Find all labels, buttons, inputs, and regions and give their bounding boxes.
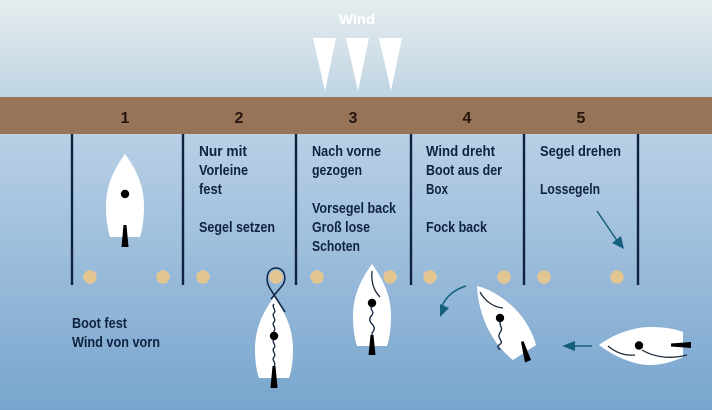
water background xyxy=(0,134,712,410)
box dividers xyxy=(72,134,638,285)
text: step 4: Box xyxy=(426,181,449,198)
boat 1 xyxy=(106,154,144,247)
arrow: sail out of box xyxy=(597,211,624,249)
text: step 3: Vorsegel back xyxy=(312,200,397,217)
text: step 4 xyxy=(426,143,502,236)
text: step 2: Vorleine xyxy=(199,162,248,179)
text: step 5: Segel drehen xyxy=(540,143,621,160)
boat 2 with bow line xyxy=(255,268,293,388)
text: step 1: Wind von vorn xyxy=(72,334,160,351)
text: step 3: Groß lose xyxy=(312,219,370,236)
arrow: boat swings to port xyxy=(440,286,466,317)
bow line around pile xyxy=(267,268,285,312)
text: step 3: Schoten xyxy=(312,238,360,255)
step numbers: 3 xyxy=(349,110,358,127)
step numbers: 2 xyxy=(235,110,244,127)
step numbers xyxy=(121,110,586,127)
text: step 4: Boot aus der xyxy=(426,162,502,179)
text: step 1 xyxy=(72,315,160,351)
text: step 1: Boot fest xyxy=(72,315,127,332)
step numbers: 5 xyxy=(577,110,586,127)
text: step 4: Fock back xyxy=(426,219,488,236)
step numbers: 1 xyxy=(121,110,130,127)
text: step 2: fest xyxy=(199,181,222,198)
arrow: sailing away xyxy=(562,341,592,351)
boat 4 xyxy=(477,286,536,362)
text: step 2: Nur mit xyxy=(199,143,247,160)
boat 5 xyxy=(599,327,691,365)
icon: wind arrows xyxy=(313,38,402,91)
text: step 5 xyxy=(540,143,621,198)
text: step 2: Segel setzen xyxy=(199,219,275,236)
sky background xyxy=(0,0,712,98)
text: step 3: gezogen xyxy=(312,162,362,179)
boat 3 xyxy=(353,264,391,355)
text: step 5: Lossegeln xyxy=(540,181,600,198)
text: step 3 xyxy=(312,143,397,255)
mooring piles xyxy=(83,270,624,284)
text: step 3: Nach vorne xyxy=(312,143,381,160)
wind heading: Wind xyxy=(339,12,375,27)
pier xyxy=(0,97,712,134)
step numbers: 4 xyxy=(463,110,472,127)
text: step 2 xyxy=(199,143,275,236)
text: step 4: Wind dreht xyxy=(426,143,495,160)
